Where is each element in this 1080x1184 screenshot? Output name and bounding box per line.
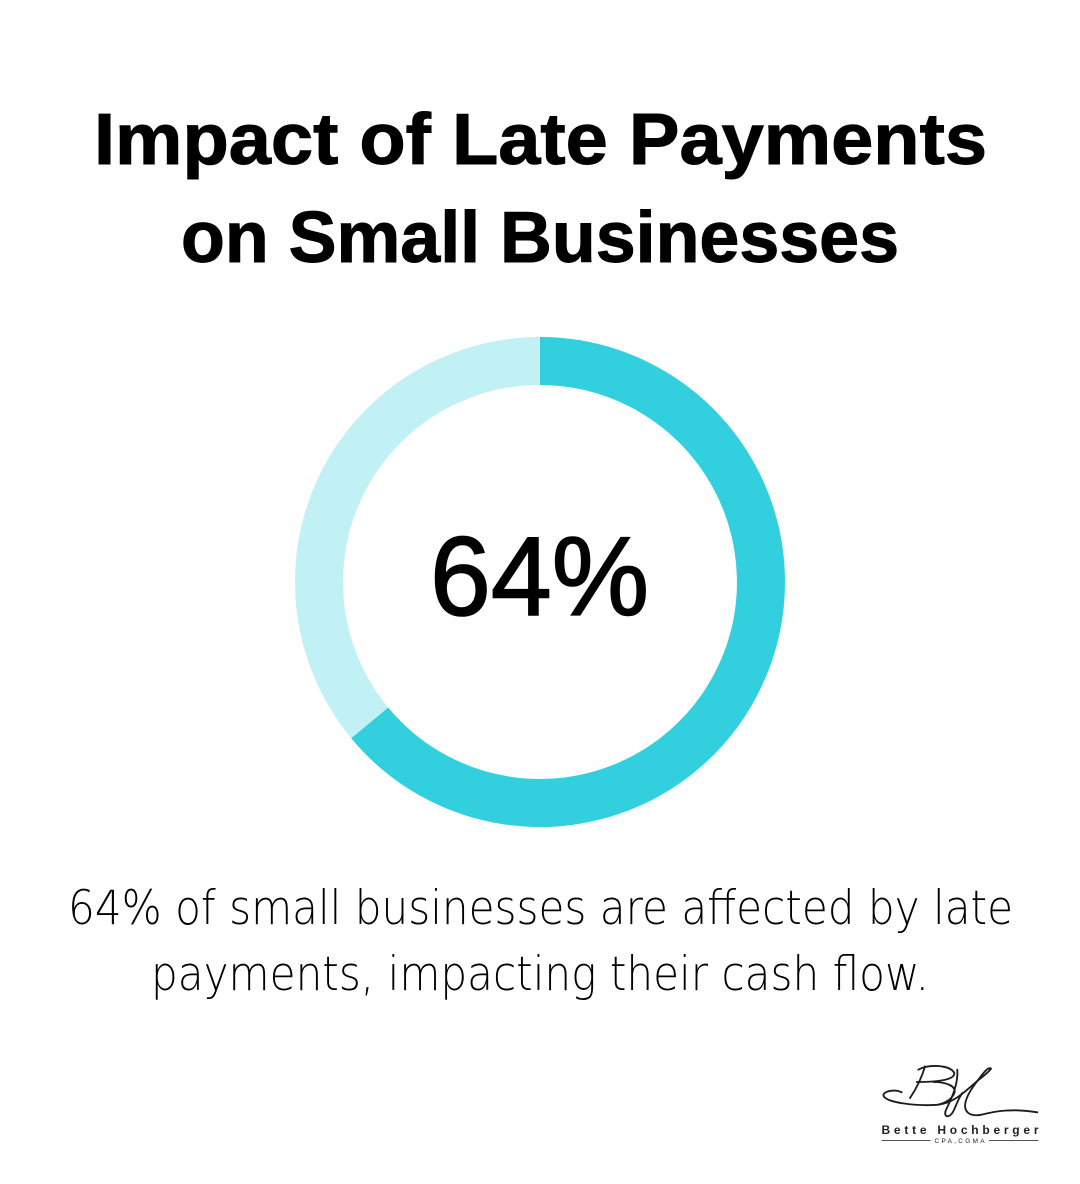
logo credentials: CPA,CGMA	[934, 1138, 985, 1145]
donut centre value: 64%	[430, 514, 649, 639]
description text	[68, 881, 1013, 1002]
logo name: Bette Hochberger	[882, 1123, 1039, 1137]
description text: payments, impacting their cash flow.	[151, 947, 929, 1002]
title: on Small Businesses	[181, 198, 899, 278]
title: Impact of Late Payments	[94, 100, 987, 180]
donut chart: 64%	[319, 361, 761, 803]
title	[94, 100, 987, 278]
logo: Bette Hochberger signature	[882, 1066, 1039, 1145]
icon: BH signature	[883, 1066, 1037, 1116]
